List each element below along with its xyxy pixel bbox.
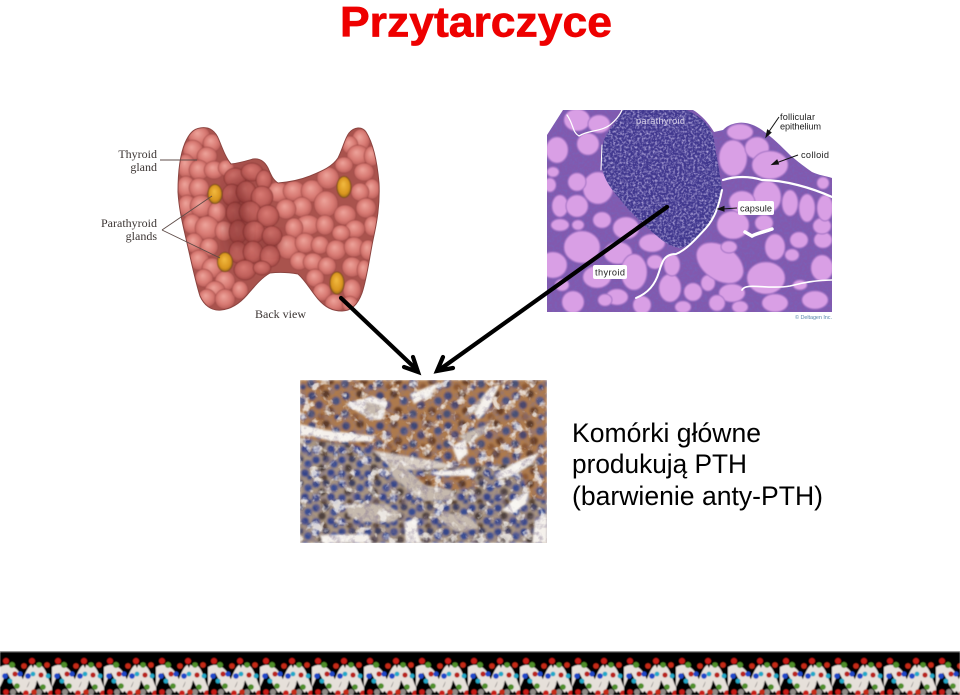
arrow: from micrograph to stained cells [437, 207, 667, 371]
tissue labels [593, 112, 832, 321]
tissue labels: thyroid [595, 268, 625, 278]
labels: Parathyroid [101, 216, 157, 230]
tissue labels: capsule [740, 204, 772, 214]
thyroid outline [178, 128, 379, 311]
tissue labels: epithelium [780, 122, 821, 132]
labels: glands [126, 229, 157, 243]
stain mottling [300, 380, 547, 543]
tissue labels: © Deltagen Inc. [795, 314, 832, 321]
footer: DNA helix strip [0, 651, 960, 695]
labels: gland [130, 160, 157, 174]
caption text: (barwienie anty-PTH) [572, 481, 823, 511]
tissue pointer arrows [718, 117, 798, 211]
stained cell fields [300, 380, 547, 543]
scattered clear patches [300, 380, 547, 543]
labels [101, 147, 306, 321]
tissue labels: colloid [801, 150, 829, 160]
micrograph: anti-PTH stained cells [300, 380, 547, 543]
caption text: Komórki główne [572, 418, 761, 448]
tissue labels: follicular [780, 112, 815, 122]
parathyroid glands [208, 176, 351, 294]
labels: Thyroid [118, 147, 157, 161]
clear gaps and gray stroma [300, 382, 547, 543]
labels: Back view [255, 307, 306, 321]
tissue labels: parathyroid [636, 116, 685, 126]
tissue section [539, 109, 833, 314]
micrograph: parathyroid and thyroid tissue [539, 109, 833, 321]
illustration: thyroid gland back view [101, 120, 385, 321]
thyroid body with lobules [178, 128, 379, 310]
parathyroid mass [600, 110, 725, 250]
leader lines [160, 160, 220, 258]
arrow: from thyroid to stained cells [341, 298, 418, 372]
white cracks and edge [547, 110, 832, 178]
caption text [572, 418, 823, 511]
caption text: produkują PTH [572, 449, 747, 479]
